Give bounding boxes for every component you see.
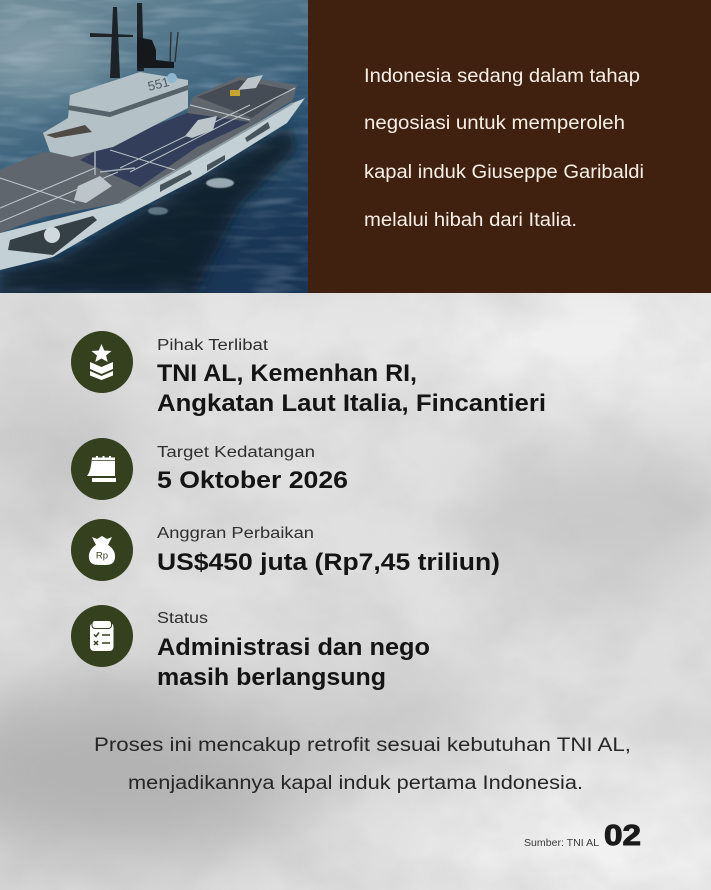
hull: [0, 98, 305, 270]
label: Anggran Perbaikan: [157, 525, 314, 542]
smoky grey background: [0, 285, 711, 890]
source: Sumber: TNI AL: [524, 837, 599, 849]
label: Pihak Terlibat: [157, 337, 269, 354]
ship shadow on water: [0, 125, 296, 293]
closing note: Proses ini mencakup retrofit sesuai kebutuhan TNI AL,: [94, 735, 631, 756]
closing note: [94, 735, 631, 794]
bow gallery: [8, 216, 97, 255]
item: Target Kedatangan: [71, 438, 348, 500]
intro text: negosiasi untuk memperoleh: [364, 113, 625, 134]
closing note: menjadikannya kapal induk pertama Indonesia.: [128, 773, 583, 794]
photo: aircraft carrier at sea: [0, 0, 308, 293]
value: US$450 juta (Rp7,45 triliun): [157, 549, 500, 576]
hull number: 551: [146, 74, 171, 94]
icon: money bag: [71, 519, 133, 581]
value: Angkatan Laut Italia, Fincantieri: [157, 390, 546, 417]
helicopters: [74, 75, 263, 203]
item: Anggaran Perbaikan: [71, 519, 500, 581]
value: 5 Oktober 2026: [157, 467, 348, 494]
hull side details: [160, 122, 270, 192]
island superstructure: [43, 72, 188, 157]
label: Target Kedatangan: [157, 444, 315, 461]
page number: 02: [604, 820, 641, 852]
value: [157, 360, 546, 417]
icon: checklist clipboard: [71, 605, 133, 667]
sea: [0, 0, 308, 293]
icon: rank star and chevrons: [71, 331, 133, 393]
label: Status: [157, 610, 208, 627]
intro text: [364, 66, 644, 231]
icon: calendar: [71, 438, 133, 500]
value: masih berlangsung: [157, 664, 386, 691]
intro text: Indonesia sedang dalam tahap: [364, 66, 640, 87]
masts and funnel: [110, 3, 144, 78]
intro text: kapal induk Giuseppe Garibaldi: [364, 162, 644, 183]
value: TNI AL, Kemenhan RI,: [157, 360, 417, 387]
item: Pihak Terlibat: [71, 331, 546, 417]
value: Administrasi dan nego: [157, 634, 430, 661]
value: [157, 634, 430, 691]
brown intro panel: [308, 0, 711, 293]
intro text: melalui hibah dari Italia.: [364, 210, 577, 231]
item: Status: [71, 605, 430, 691]
icon: money bag: Rp: [96, 550, 108, 562]
flight deck: [0, 76, 297, 233]
